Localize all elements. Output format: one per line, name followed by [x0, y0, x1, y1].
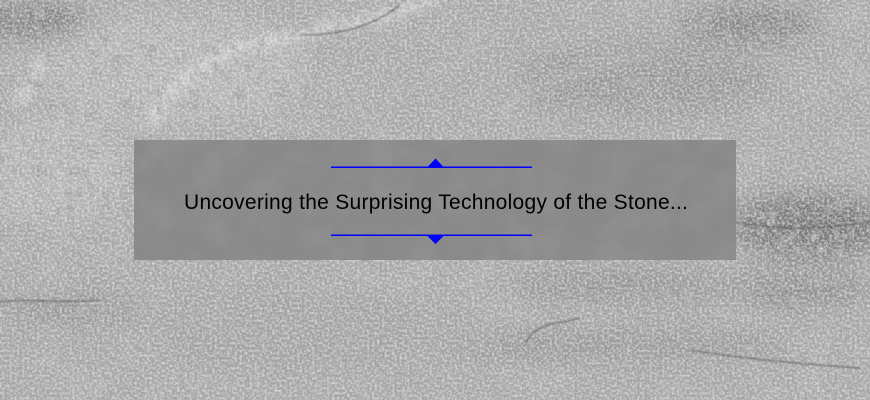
- decorative rule: bottom line with down-pointing triangle: [331, 234, 532, 244]
- title text: Uncovering the Surprising Technology of the Stone...: [184, 191, 688, 214]
- decorative rule: top line with up-pointing triangle: [331, 158, 532, 168]
- panel: translucent title band: [134, 140, 736, 260]
